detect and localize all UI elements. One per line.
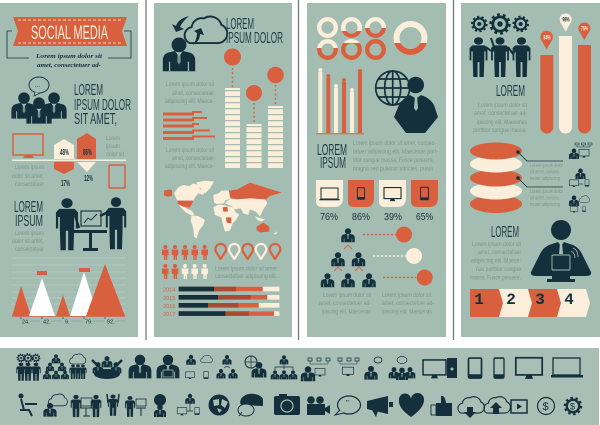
horizontal bars [163, 111, 215, 140]
numbered chevrons: 1 [474, 291, 484, 309]
triangle chart: 24. [22, 320, 30, 326]
text columns: ipiscing elit. Maecenas [382, 308, 433, 316]
stacked bars by year: 2016 [163, 304, 176, 310]
stacked bars by year: 2017 [163, 312, 176, 318]
stat hexagons: 12% [84, 174, 93, 183]
text columns: amet, consectetuer ad- [382, 300, 434, 307]
heading: lorem ipsum [14, 199, 43, 230]
heading [226, 16, 283, 47]
icon strip [0, 348, 599, 425]
text block [473, 102, 528, 134]
heading: IPSUM DOLOR [74, 97, 131, 114]
dotted connector circles [363, 226, 433, 286]
text block: adipiscing elit. Maece- [165, 98, 214, 105]
text block: magna sed pulvinar ultricies, purus [353, 166, 434, 172]
disk text: Lorem ipsum dolor [530, 189, 563, 195]
panel: statistics and devices [307, 3, 446, 337]
panel: teamwork [461, 3, 600, 337]
percentages: 76% [320, 212, 338, 223]
heading: lorem ipsum: LOREM [317, 142, 347, 159]
icon: monitor [13, 134, 43, 158]
text block: Lorem ipsum dolor sit [166, 147, 214, 154]
text block: amet, consectetuer [172, 155, 215, 162]
heading: lorem ipsum: IPSUM [320, 155, 346, 172]
subtitle bracket: amet, consectetuer ad- [37, 62, 101, 69]
stat hexagons: 48% [60, 148, 69, 157]
text block: Lorem ipsum dolor sit [472, 241, 521, 248]
heading: IPSUM DOLOR [226, 30, 283, 47]
text columns: Lorem ipsum dolor sit [382, 292, 431, 299]
disk text [530, 163, 563, 208]
text block: Lorem ipsum dolor sit [166, 81, 214, 88]
text columns: ipiscing elit. Maecenas [322, 308, 372, 316]
map text [215, 266, 278, 280]
tube chart: 84% [544, 36, 551, 42]
text columns [319, 292, 434, 316]
stacked bars by year: 2015 [163, 296, 176, 302]
divider lines [146, 0, 454, 340]
subtitle bracket [7, 31, 131, 69]
world map [164, 181, 282, 238]
disk text: sit amet, consec- [530, 196, 560, 202]
stat hexagons: 17% [61, 179, 70, 188]
icon: cloud businessman [163, 16, 227, 71]
icon: three men [470, 37, 530, 77]
subtitle bracket: Lorem ipsum dolor sit [35, 53, 102, 60]
numbered chevrons: 3 [535, 291, 545, 309]
disk text: sit amet, consec- [530, 170, 560, 176]
text block right [106, 135, 124, 158]
text block: adipiscing elit. Maece- [165, 163, 214, 170]
triangle chart: 79. [85, 320, 93, 326]
text block: amet, consectetuer [478, 249, 522, 256]
percentages: 86% [352, 212, 370, 223]
stacked bars by year [163, 287, 279, 318]
text block: massa. Fusce posuere. [470, 274, 521, 282]
row 2 icons: $ [542, 401, 549, 413]
text block right: dolor sit [106, 151, 124, 158]
text block left: consectetuer [15, 181, 45, 188]
percentages [320, 212, 433, 223]
text block right: ipsum [106, 143, 120, 150]
people icons [162, 245, 208, 279]
text block [353, 140, 438, 172]
map text: Lorem ipsum dolor sit amet, [215, 266, 278, 272]
text block: amet, consectetuer ad- [474, 110, 527, 117]
donut charts [319, 19, 424, 58]
icon: globe and businessman [376, 71, 438, 133]
triangle chart [12, 258, 126, 326]
percentages: 65% [416, 212, 433, 223]
text block: consectetuer [15, 246, 45, 253]
stat hexagons [12, 133, 126, 188]
text block: amet, consectetuer [172, 90, 215, 97]
icon: two businessmen at presentation table [56, 197, 126, 251]
numbered chevrons: 4 [564, 291, 574, 309]
numbered chevrons: 2 [506, 291, 516, 309]
disk stack [470, 142, 563, 213]
text block: ipiscing elit. Maecenas [477, 119, 528, 126]
text block: porttitor congue massa. [473, 127, 527, 134]
heading: lorem ipsum: IPSUM [15, 213, 43, 230]
row 2 icons: $ [570, 402, 575, 412]
stat hexagons: 86% [83, 148, 92, 157]
row 2 icons: " [346, 399, 349, 408]
map pins [215, 244, 280, 259]
text block [470, 241, 522, 282]
text columns: amet, consectetuer ad- [319, 300, 371, 307]
heading: LOREM [226, 16, 254, 33]
triangle chart: 9. [65, 320, 70, 326]
text block: titor congue massa. Fusce posuere, [353, 157, 434, 164]
icon: tablet [109, 165, 125, 188]
text block: adipiscing elit. Maece- [471, 258, 521, 264]
banner: social media: SOCIAL MEDIA [31, 23, 108, 44]
device tiles [316, 180, 438, 207]
panel: teamwork: LOREM [491, 224, 519, 241]
tube chart: 75% [581, 26, 588, 32]
text block [165, 147, 215, 170]
text block: Lorem ipsum [15, 230, 44, 237]
heading: lorem: LOREM [496, 83, 525, 100]
text block left: Lorem ipsum [15, 164, 44, 171]
text block: Lorem ipsum dolor sit amet, consec- [353, 140, 436, 147]
tube chart [540, 13, 591, 134]
network icons [569, 143, 592, 212]
disk text: Lorem ipsum dolor [530, 163, 563, 169]
banner: social media [13, 17, 127, 46]
column chart [316, 68, 364, 134]
icon: gears [472, 15, 528, 33]
heading: LOREM [74, 82, 103, 99]
text block: nas porttitor congue [476, 266, 521, 273]
heading [74, 82, 131, 128]
heading: lorem ipsum: LOREM [14, 199, 43, 216]
panel: social media [0, 3, 138, 337]
triangle chart: 92. [107, 320, 115, 326]
disk text: tetuer adipiscing [530, 202, 560, 208]
text columns: Lorem ipsum dolor sit [323, 292, 371, 299]
text block right: Lorem [106, 135, 120, 142]
numbered chevrons [470, 289, 590, 317]
row 1 icons [16, 354, 583, 381]
text block: Lorem ipsum dolor sit [478, 102, 527, 109]
stacked bars by year: 2014 [163, 288, 176, 294]
text block left [12, 164, 45, 188]
disk text: tetuer adipiscing [530, 176, 560, 182]
text block [165, 81, 215, 105]
map text: consectetuer adipiscing elit. [215, 273, 277, 280]
tube chart: 98% [562, 18, 570, 24]
coin stacks with circles [224, 48, 284, 168]
icon: three people with speech bubble: ... [35, 83, 40, 89]
org pyramid [321, 228, 376, 287]
text block: dolor sit amet, [12, 238, 44, 245]
text block left: dolor sit amet, [12, 173, 44, 180]
icon: businessman with tablet [531, 220, 591, 282]
icon: three people with speech bubble [11, 77, 67, 124]
text block: tetuer adipiscing elit. Maecenas port- [353, 148, 438, 156]
heading: SIT AMET, [74, 111, 117, 128]
row 2 icons [18, 393, 581, 418]
triangle chart: 42. [43, 320, 51, 326]
text block [12, 230, 45, 253]
percentages: 39% [384, 212, 402, 223]
heading: lorem ipsum [317, 142, 347, 172]
panel: cloud and map [154, 3, 292, 337]
